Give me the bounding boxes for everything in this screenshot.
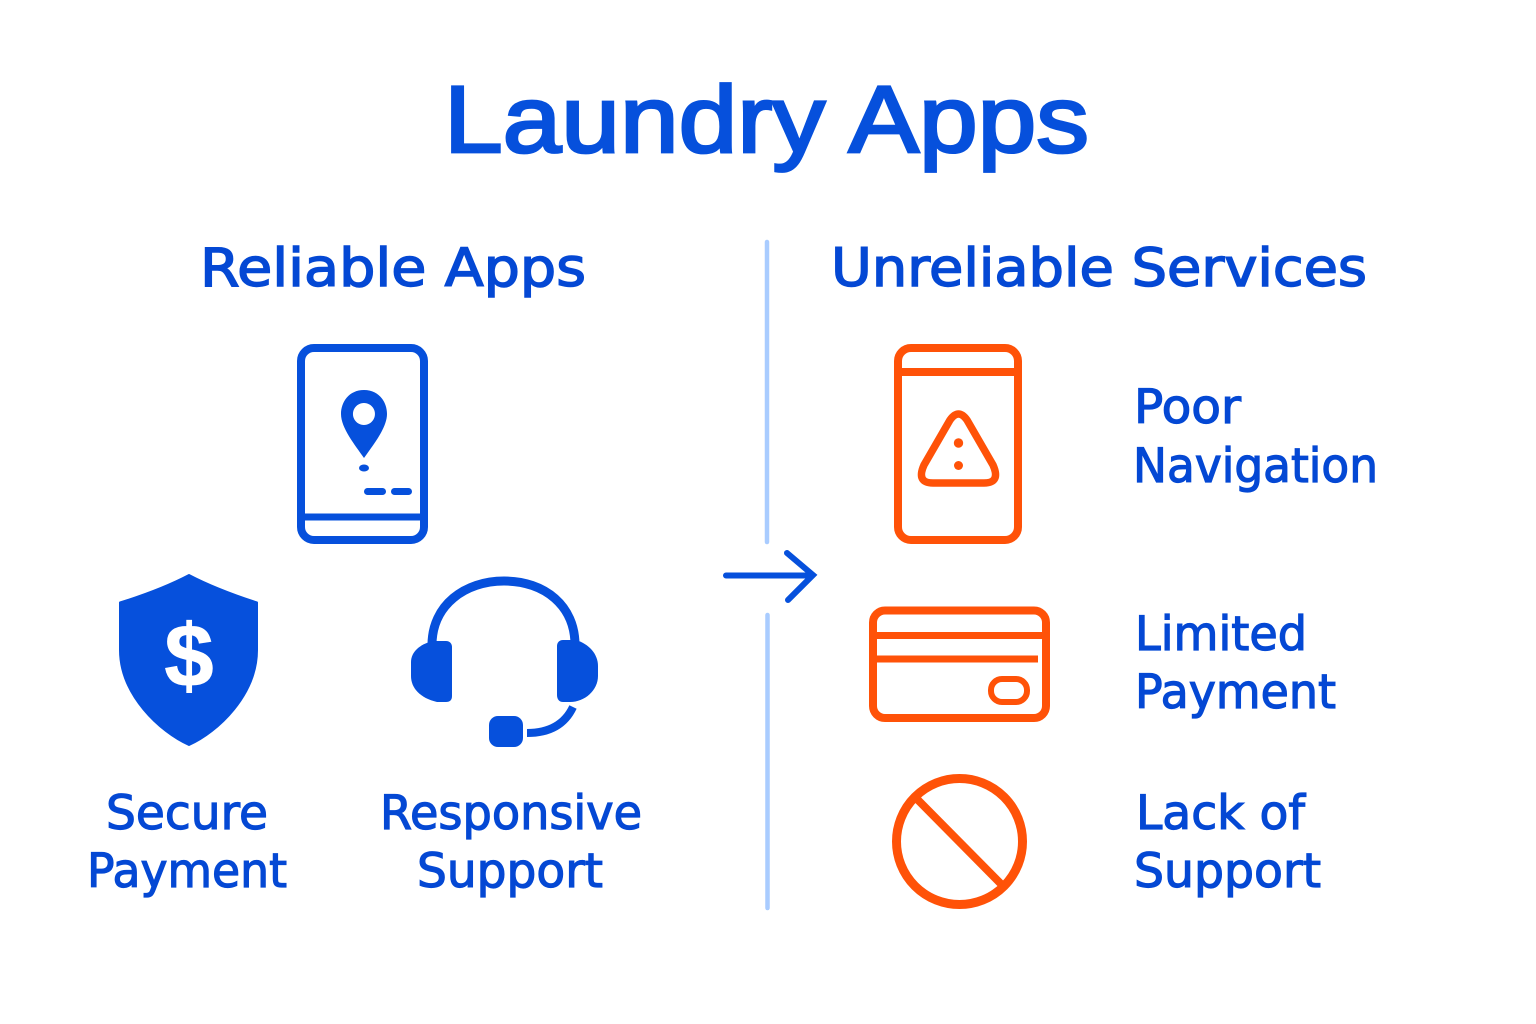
label: Lack of Support: Support (1134, 844, 1321, 899)
arrow (726, 553, 813, 600)
label: Secure Payment: Payment (87, 844, 287, 899)
label: Lack of Support: Lack of (1136, 786, 1306, 841)
label: Poor Navigation: Navigation (1133, 439, 1378, 494)
label: Responsive Support: Responsive (380, 786, 642, 841)
icon: credit card (873, 610, 1046, 718)
divider bottom (765, 615, 770, 908)
divider top (765, 242, 769, 542)
icon: prohibited sign (896, 778, 1022, 904)
label: Limited Payment: Limited (1135, 607, 1307, 662)
label: Responsive Support: Support (417, 844, 603, 899)
icon: shield with dollar (120, 575, 257, 745)
icon: shield with dollar: $ (165, 606, 213, 705)
heading: Reliable Apps: Reliable Apps (200, 238, 586, 299)
title: Laundry Apps (444, 67, 1089, 173)
label: Poor Navigation: Poor (1134, 380, 1242, 435)
icon: phone with warning (898, 348, 1018, 540)
label: Secure Payment: Secure (106, 786, 268, 841)
heading: Unreliable Services: Unreliable Services (831, 238, 1367, 299)
icon: phone with location pin (301, 348, 424, 540)
icon: headset (411, 581, 598, 747)
label: Limited Payment: Payment (1135, 665, 1336, 720)
